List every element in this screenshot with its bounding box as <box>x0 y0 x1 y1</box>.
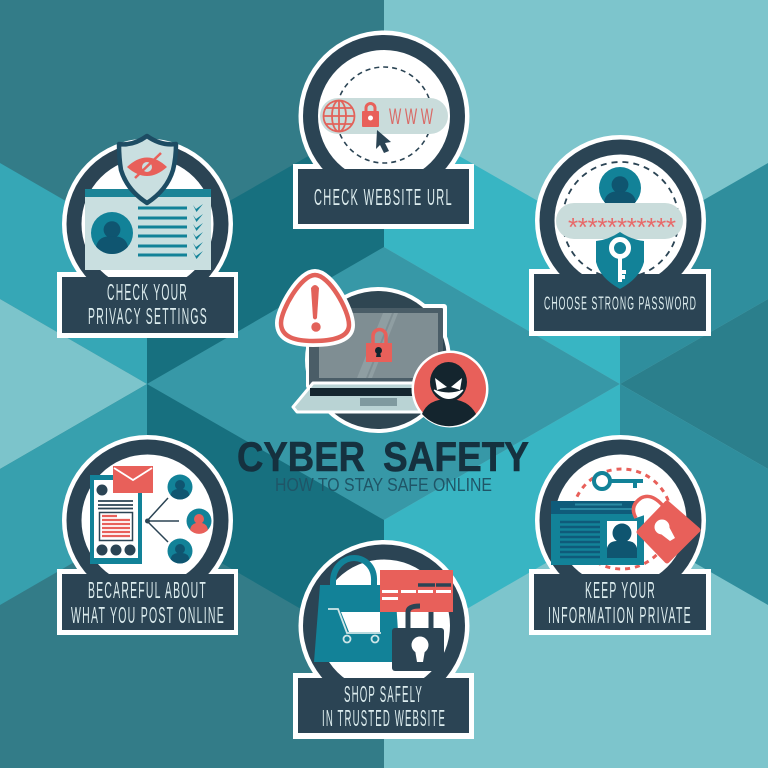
password asterisks: *********** <box>568 212 676 242</box>
panel: shop safely: IN TRUSTED WEBSITE <box>322 705 446 731</box>
id card <box>85 189 211 270</box>
label <box>548 577 692 628</box>
icon: screen lock <box>366 330 392 362</box>
icon: envelope <box>113 466 153 493</box>
panel: be careful what you post <box>57 435 238 635</box>
central illustration: hacked laptop <box>281 275 488 433</box>
text: WHAT YOU POST ONLINE <box>71 602 225 628</box>
www text: W W W <box>389 104 433 129</box>
icon: hacker <box>412 350 488 428</box>
title: SAFETY <box>383 433 529 480</box>
icon: lock <box>362 104 379 127</box>
title <box>237 433 529 480</box>
label: KEEP YOUR <box>585 577 656 603</box>
icon: cursor <box>376 130 391 153</box>
icon: globe <box>324 100 354 132</box>
password bar <box>556 203 683 239</box>
icon: key <box>594 473 643 489</box>
panel: check website url <box>293 30 474 229</box>
label <box>71 577 225 628</box>
panel: check your privacy settings: PRIVACY SETTINGS <box>88 303 208 329</box>
icon: padlock <box>392 606 444 671</box>
icon: sharing arrows <box>145 498 179 542</box>
panel: keep information private <box>529 435 711 635</box>
laptop <box>293 308 443 412</box>
label <box>322 681 446 731</box>
url bar <box>320 98 448 134</box>
icon: warning triangle <box>281 275 349 341</box>
panel: check website url: CHECK WEBSITE URL <box>314 184 453 210</box>
label: BECAREFUL ABOUT <box>88 577 207 603</box>
icon: user avatar <box>599 167 641 209</box>
label: CHECK YOUR <box>107 279 188 305</box>
subtitle: HOW TO STAY SAFE ONLINE <box>275 475 492 495</box>
icon: contacts <box>168 474 212 564</box>
panel: choose strong password <box>529 135 711 336</box>
panel: check your privacy settings <box>57 136 238 338</box>
label <box>88 279 208 329</box>
icon: shopping bag with cart <box>314 558 400 662</box>
icon: phone <box>90 475 142 564</box>
icon: key shield <box>596 232 644 289</box>
panel: shop safely <box>293 540 474 739</box>
title: CYBER <box>237 433 365 480</box>
label: SHOP SAFELY <box>344 681 423 707</box>
icon: shield with crossed eye <box>119 136 176 203</box>
icon: credit card <box>380 570 453 612</box>
icon: id card <box>551 501 644 565</box>
icon: red padlock <box>633 496 698 561</box>
